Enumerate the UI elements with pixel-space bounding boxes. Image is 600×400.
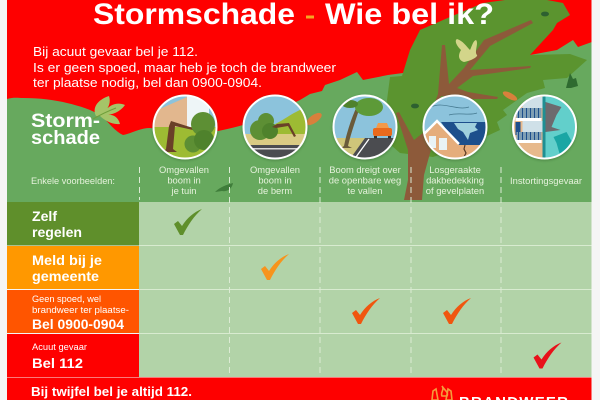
footer text: Bij twijfel bel je altijd 112. <box>31 384 192 399</box>
column labels: Omgevallen <box>159 164 209 175</box>
check: gemeente <box>261 254 289 280</box>
small leaf by the first column <box>215 183 233 192</box>
intro text: Is er geen spoed, maar heb je toch de brandweer <box>33 60 337 75</box>
column labels <box>159 164 582 196</box>
icon: collapse hazard <box>512 95 578 161</box>
check: 0900 col 3 <box>352 298 380 324</box>
small dark leaf mid <box>411 104 419 108</box>
column labels: Boom dreigt over <box>329 164 401 175</box>
column labels: boom in <box>167 174 201 186</box>
row: meld bij je gemeente <box>7 246 139 289</box>
row: bel 112: Bel 112 <box>32 355 83 371</box>
panel: green hill background <box>7 40 592 205</box>
title dash <box>306 16 314 18</box>
row: meld bij je gemeente: Meld bij je <box>32 252 102 268</box>
check: zelf regelen <box>174 209 202 235</box>
icon: tree threatens to fall on road <box>332 95 398 161</box>
row dividers <box>139 246 592 334</box>
tree illustration <box>387 0 587 200</box>
column labels: Losgeraakte <box>429 164 481 175</box>
leaf cluster near heading <box>93 96 125 124</box>
check: 112 <box>534 342 562 368</box>
row: bel 0900-0904: Bel 0900-0904 <box>32 316 124 332</box>
row: bel 0900-0904 <box>7 290 139 333</box>
orange falling leaf left <box>304 111 324 127</box>
column labels: de openbare weg <box>329 174 401 186</box>
intro text <box>33 44 337 90</box>
heading: Storm-schade: Storm- <box>31 111 100 132</box>
tree trunk and branches <box>396 20 533 200</box>
column labels: Omgevallen <box>250 164 300 175</box>
heading: Storm-schade <box>31 111 100 149</box>
row: bel 112: Acuut gevaar <box>32 342 87 352</box>
icon: loose roof covering <box>422 95 488 161</box>
column labels: dakbedekking <box>426 174 484 186</box>
icon: fallen tree on verge <box>242 95 308 161</box>
row: zelf regelen <box>7 202 139 246</box>
leaf on tree <box>456 39 477 62</box>
column labels: of gevelplaten <box>426 185 484 196</box>
column dividers <box>140 167 501 377</box>
icon: fallen tree in garden <box>152 95 218 161</box>
subheading: examples: Enkele voorbeelden: <box>31 175 115 186</box>
row: zelf regelen: regelen <box>32 224 82 240</box>
row: zelf regelen: Zelf <box>32 208 57 224</box>
table background <box>139 202 592 377</box>
row: bel 0900-0904: Geen spoed, wel <box>32 294 101 304</box>
column labels: de berm <box>258 185 292 196</box>
row: bel 0900-0904: brandweer ter plaatse- <box>32 305 129 315</box>
column labels: te vallen <box>348 185 382 196</box>
row: meld bij je gemeente: gemeente <box>32 268 99 284</box>
dark falling leaf right <box>566 73 578 88</box>
column labels: je tuin <box>170 185 197 196</box>
row: bel 112 <box>7 334 139 377</box>
panel: red header <box>7 0 592 140</box>
tree crown <box>387 0 587 157</box>
column labels: Instortingsgevaar <box>510 175 582 186</box>
intro text: Bij acuut gevaar bel je 112. <box>33 44 198 59</box>
heading: Storm-schade: schade <box>31 128 100 149</box>
footer band <box>7 378 592 400</box>
column labels: boom in <box>258 174 292 186</box>
brandweer logo <box>432 386 568 400</box>
check: 0900 col 4 <box>443 298 471 324</box>
small dark leaf top <box>541 12 549 16</box>
orange falling leaf <box>502 90 518 102</box>
intro text: ter plaatse nodig, bel dan 0900-0904. <box>33 75 262 90</box>
